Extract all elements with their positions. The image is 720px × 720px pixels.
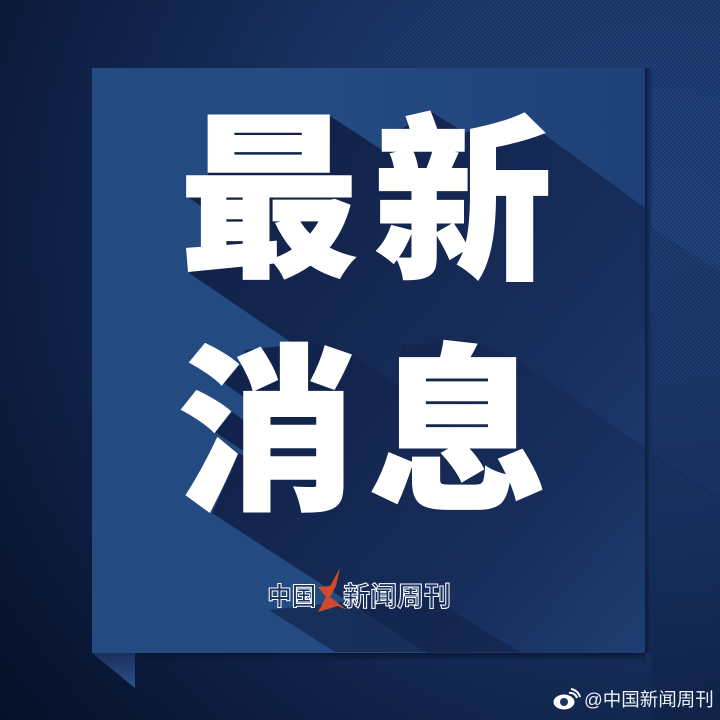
- folded corner: [92, 653, 135, 688]
- logo text right: 新闻周刊: [343, 582, 451, 612]
- title character: 息: 息: [369, 290, 547, 547]
- logo star: [318, 568, 347, 612]
- logo: China Newsweek: [267, 568, 451, 612]
- logo text left: 中国: [267, 583, 316, 611]
- outer long shadows: [652, 228, 720, 720]
- title character: 消: 消: [178, 290, 356, 547]
- weibo icon: [554, 688, 581, 710]
- long shadows: [189, 111, 645, 653]
- blue panel: [92, 68, 645, 653]
- title character: 最: 最: [180, 57, 358, 314]
- panel edge shadow bottom: [135, 653, 645, 661]
- watermark: [554, 688, 714, 710]
- handle: @中国新闻周刊: [584, 689, 714, 710]
- title character: 新: 新: [374, 60, 552, 317]
- panel edge shadow right: [645, 68, 653, 653]
